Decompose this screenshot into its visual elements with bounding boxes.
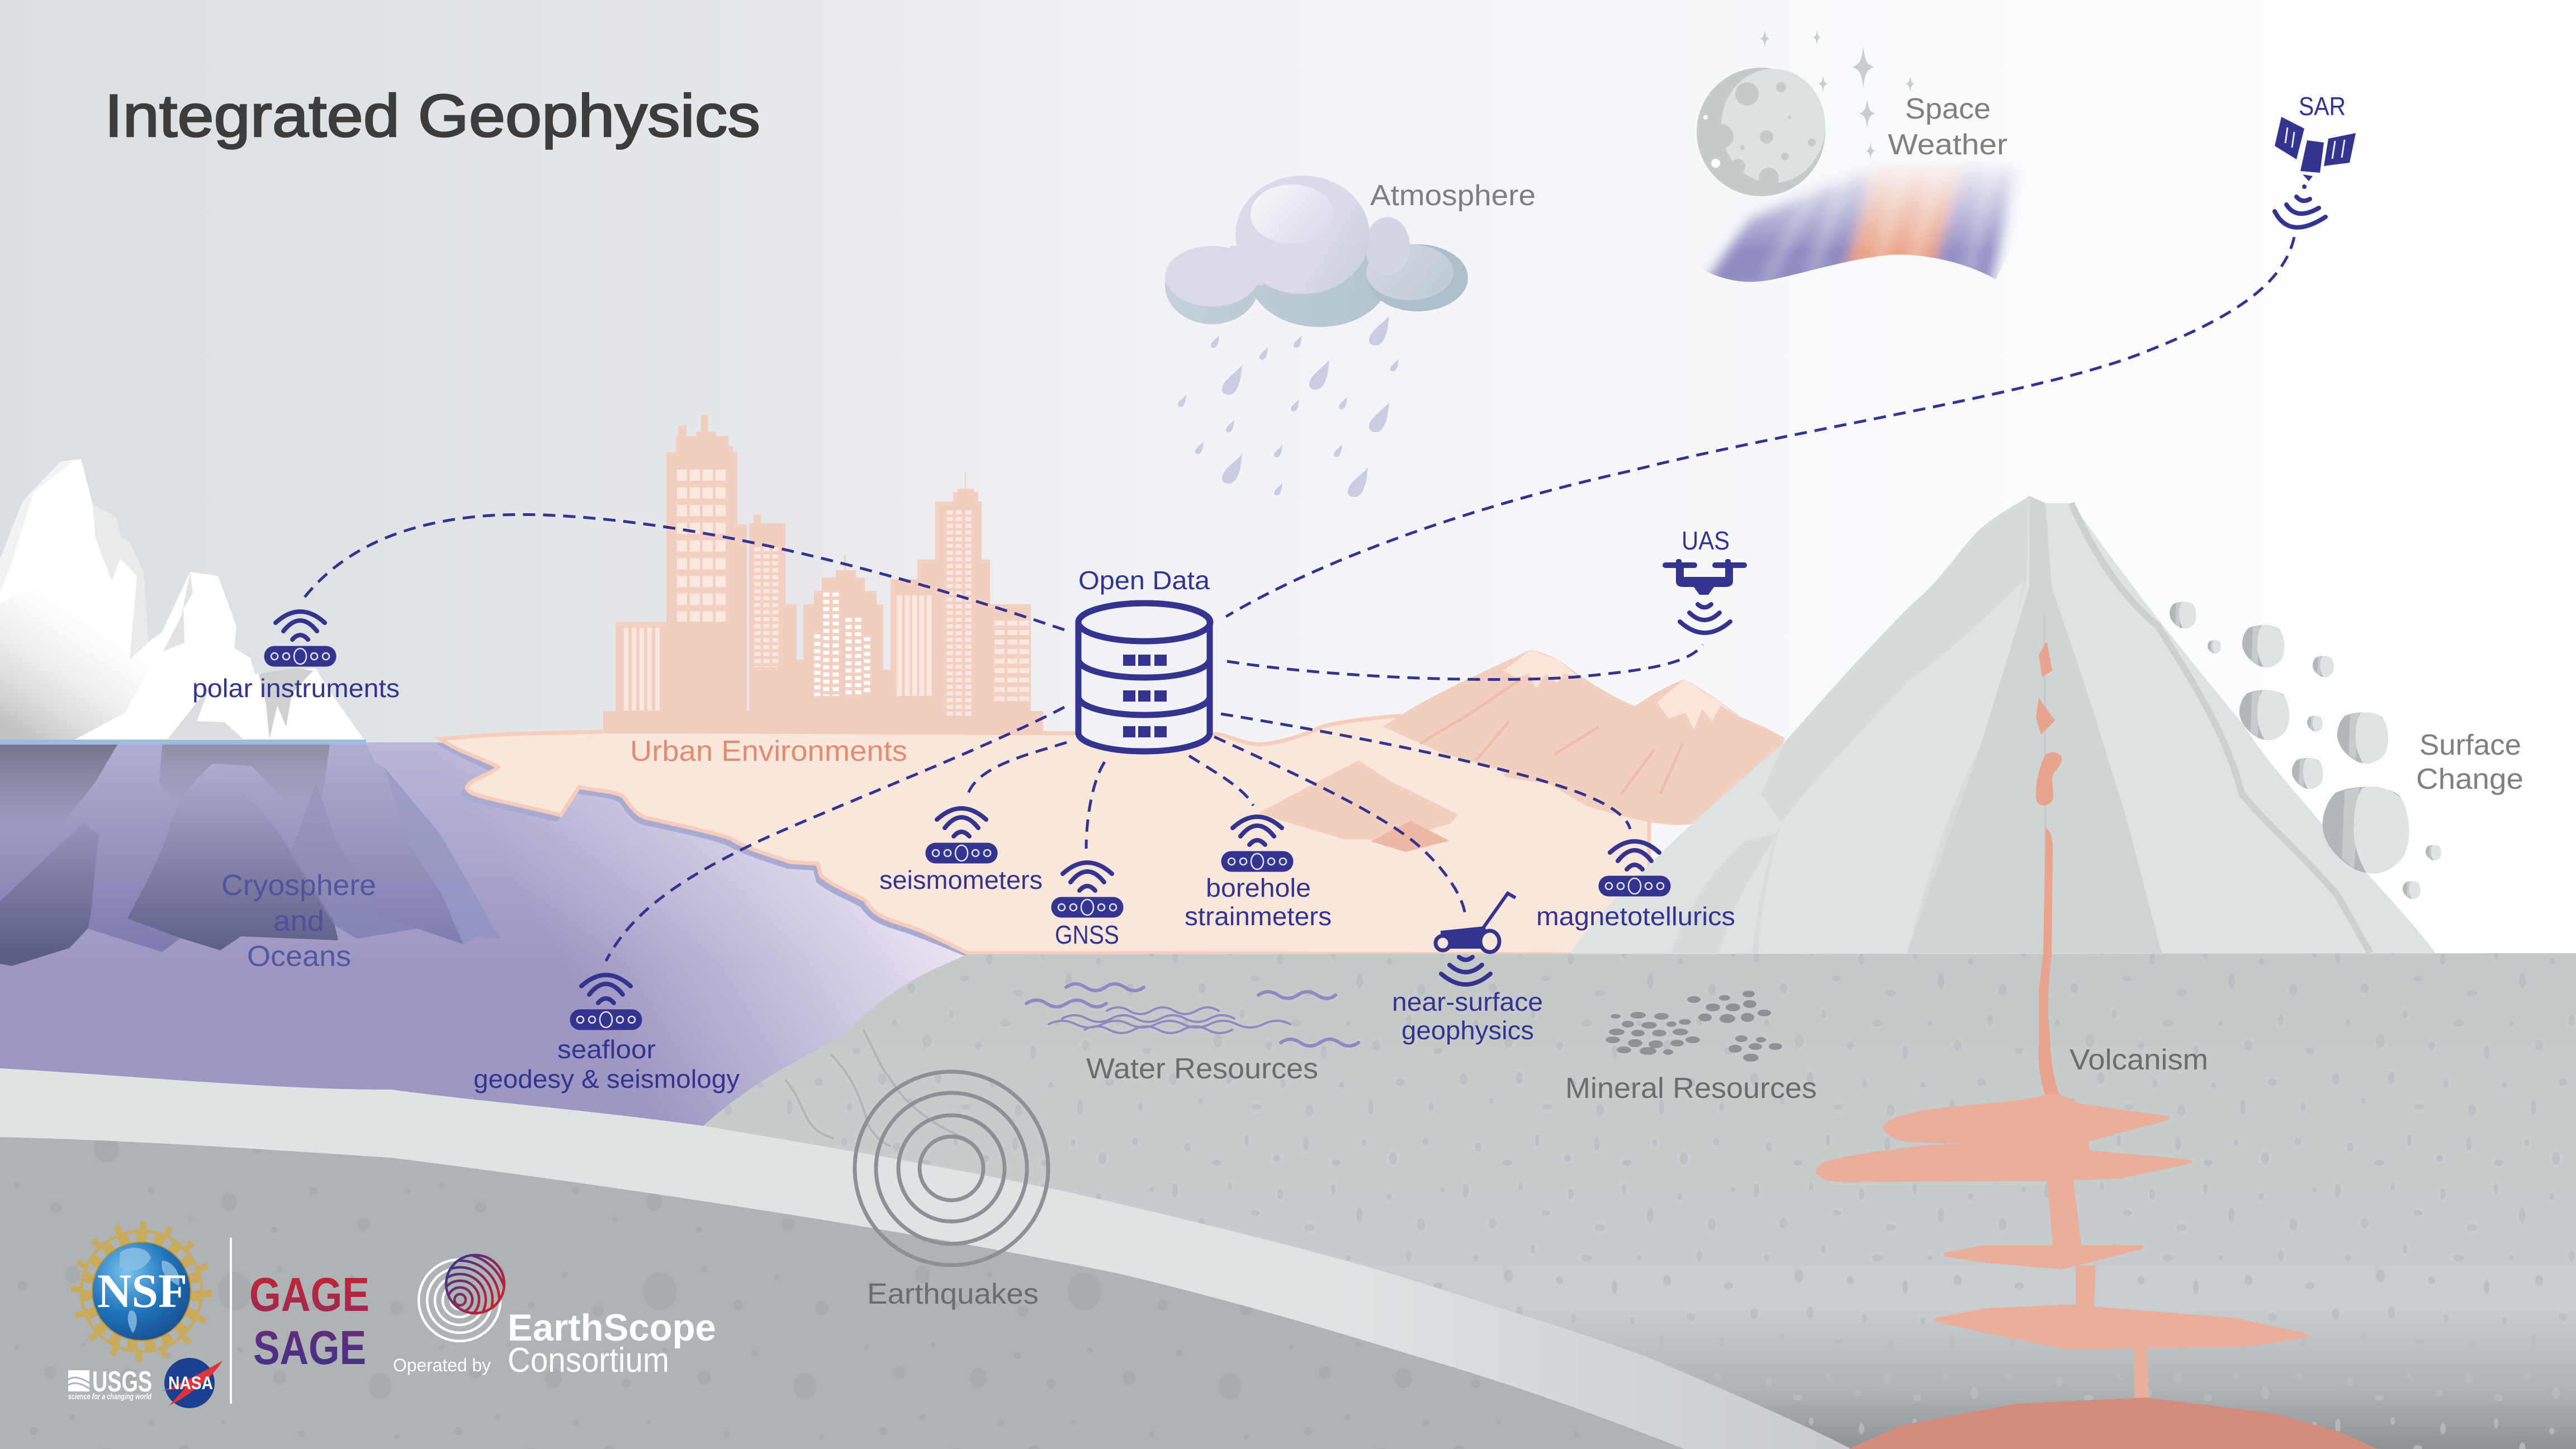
instrument: GNSS <box>1051 863 1124 949</box>
water waves <box>1026 984 1358 1046</box>
logo: NASA: NASA <box>168 1373 213 1393</box>
cracks <box>785 1029 965 1146</box>
plate band <box>0 1068 1852 1449</box>
instrument: seismometers: seismometers <box>879 865 1043 894</box>
logo: EarthScope Consortium <box>393 1254 716 1380</box>
logo: NASA <box>162 1358 222 1408</box>
stars <box>1760 30 1915 159</box>
label: Space Weather: Weather <box>1888 129 2007 161</box>
logo: USGS <box>68 1366 152 1401</box>
aurora <box>1703 165 2016 282</box>
label: Mineral Resources: Mineral Resources <box>1565 1072 1817 1105</box>
logo divider <box>230 1238 232 1404</box>
label: Cryosphere and Oceans: and <box>273 905 324 937</box>
iceberg below water <box>0 744 500 966</box>
cloud <box>1165 176 1468 327</box>
magma plumbing <box>1818 643 2378 1449</box>
logo: NSF <box>77 1227 206 1356</box>
small foreground hill <box>1258 760 1458 852</box>
raindrops <box>1178 316 1399 497</box>
Open Data label: Open Data <box>1078 566 1210 595</box>
city skyline <box>603 415 1043 733</box>
logo: EarthScope Consortium: Operated by <box>393 1355 491 1375</box>
label: Surface Change <box>2416 729 2523 795</box>
label: Urban Environments: Urban Environments <box>630 735 907 768</box>
UAS label: UAS <box>1682 526 1730 555</box>
instrument: seafloor geodesy and seismology: geodesy & seismology <box>473 1064 740 1093</box>
logo: EarthScope Consortium: Consortium <box>508 1341 669 1380</box>
instrument: borehole strainmeters: strainmeters <box>1185 902 1332 931</box>
label: Space Weather <box>1888 93 2007 161</box>
iceberg above water <box>0 459 366 742</box>
instrument: magnetotellurics <box>1536 841 1735 931</box>
water surface line <box>0 740 366 745</box>
mineral deposits <box>1606 991 1782 1062</box>
label: Surface Change: Surface <box>2419 729 2521 761</box>
earthquake rings <box>855 1072 1048 1265</box>
logo: NSF: NSF <box>97 1264 187 1318</box>
rock speckles <box>559 953 2576 1449</box>
instrument: seafloor geodesy and seismology: seafloor <box>557 1035 656 1064</box>
label: Cryosphere and Oceans <box>221 869 376 973</box>
instrument: borehole strainmeters <box>1185 817 1332 931</box>
pink mountains <box>1383 650 1785 825</box>
logo: USGS: USGS <box>92 1366 152 1398</box>
logo: USGS: science for a changing world <box>68 1392 152 1401</box>
database: Open Data <box>1078 566 1210 751</box>
instrument: polar instruments <box>192 612 400 703</box>
logo: EarthScope Consortium: EarthScope <box>508 1306 716 1349</box>
instrument: seafloor geodesy and seismology <box>473 975 740 1093</box>
instrument: near-surface geophysics: geophysics <box>1401 1016 1534 1045</box>
label: Water Resources: Water Resources <box>1086 1053 1318 1085</box>
volcano <box>1570 496 2436 954</box>
land <box>436 716 1649 957</box>
label: Volcanism: Volcanism <box>2070 1044 2208 1076</box>
instrument: borehole strainmeters: borehole <box>1206 873 1311 902</box>
falling rocks <box>2170 602 2441 899</box>
label: Earthquakes: Earthquakes <box>867 1278 1039 1310</box>
UAS drone <box>1663 526 1747 633</box>
satellite SAR <box>2275 92 2356 228</box>
magma chamber <box>1849 1398 2378 1449</box>
logo: SAGE: SAGE <box>253 1322 366 1375</box>
logo: GAGE: GAGE <box>249 1268 370 1322</box>
moon <box>1697 68 1825 196</box>
rock layer <box>559 953 2576 1449</box>
instrument: polar instruments: polar instruments <box>192 674 400 703</box>
label: Cryosphere and Oceans: Oceans <box>247 940 351 973</box>
label: Atmosphere: Atmosphere <box>1370 179 1536 212</box>
label: Space Weather: Space <box>1905 93 1991 125</box>
instrument: GNSS: GNSS <box>1055 920 1119 949</box>
mantle <box>0 1137 1684 1449</box>
instrument: magnetotellurics: magnetotellurics <box>1536 902 1735 931</box>
label: Cryosphere and Oceans: Cryosphere <box>221 869 376 902</box>
connection lines <box>305 237 2294 961</box>
ocean <box>0 742 1006 1190</box>
lava blobs in volcano <box>2036 643 2062 1096</box>
instrument: near-surface geophysics: near-surface <box>1392 987 1543 1016</box>
title: Integrated Geophysics <box>105 82 760 149</box>
label: Surface Change: Change <box>2416 763 2523 795</box>
SAR label: SAR <box>2299 92 2346 121</box>
instrument: seismometers <box>879 808 1043 894</box>
magma sills <box>1818 1096 2307 1400</box>
instrument: near-surface geophysics <box>1392 893 1543 1045</box>
